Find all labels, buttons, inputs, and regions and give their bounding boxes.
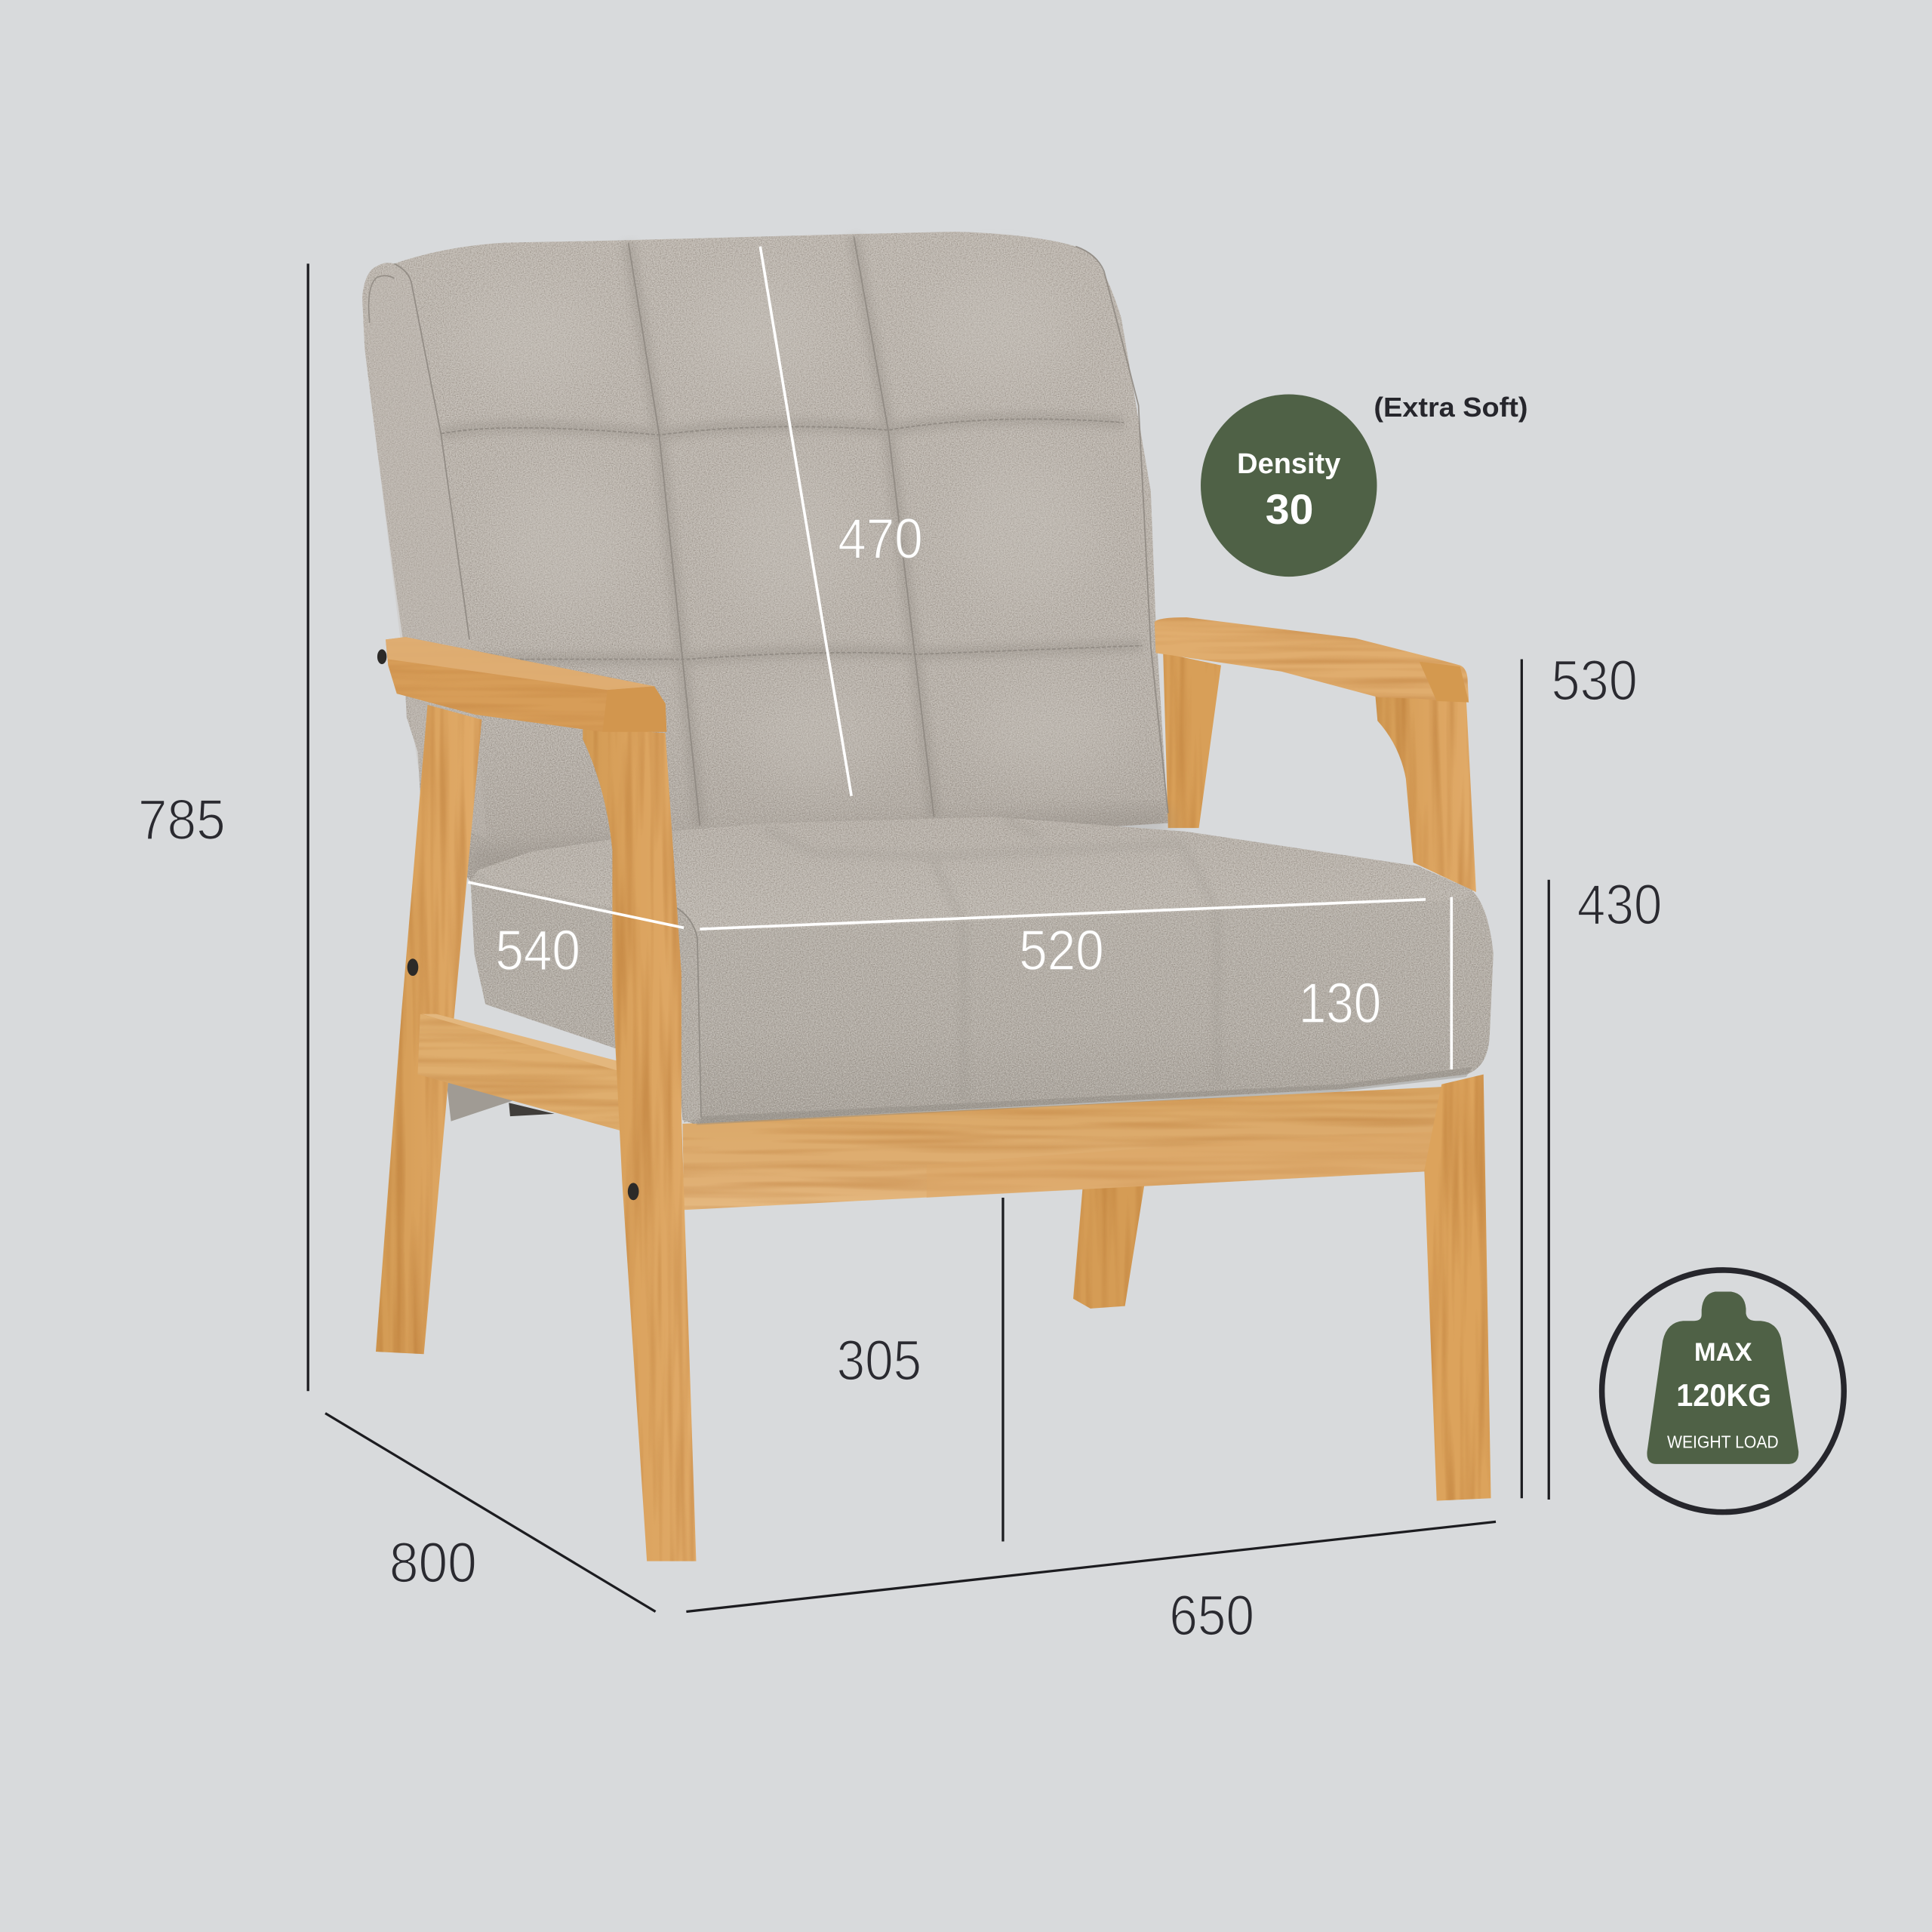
rear right leg [1073, 1183, 1145, 1309]
left arm rest [386, 637, 666, 732]
front rail [682, 1087, 1444, 1210]
backrest upholstery [362, 232, 1168, 888]
seat left side [471, 882, 622, 1050]
backrest tuft shading [441, 236, 1142, 826]
density badge: Density [1237, 448, 1340, 479]
max weight badge: WEIGHT LOAD [1667, 1432, 1779, 1451]
white dimension labels: 470 [838, 507, 923, 571]
right arm rest [1155, 617, 1469, 703]
max weight badge [1602, 1270, 1844, 1512]
badge ring [1602, 1270, 1844, 1512]
dark dimension labels: 430 [1577, 872, 1662, 936]
front rail joint shading [927, 1131, 1444, 1198]
density badge: 30 [1266, 486, 1313, 533]
backrest cushion highlights [456, 271, 1121, 789]
seat front left piping edge [675, 907, 701, 1118]
dark dimension labels: 650 [1169, 1584, 1254, 1647]
dark dimension labels: 305 [837, 1329, 921, 1392]
screws [377, 649, 639, 1200]
max weight badge: 120KG [1676, 1377, 1771, 1413]
seat top surface [478, 817, 1471, 931]
backrest side shading [365, 266, 487, 838]
right arm post [1375, 693, 1476, 892]
rear right post [1163, 653, 1221, 828]
weight icon [1647, 1292, 1798, 1464]
armchair photo [362, 232, 1494, 1561]
dark dimension labels: 785 [138, 788, 226, 851]
white dimension labels: 520 [1019, 918, 1104, 982]
side rail [417, 1014, 622, 1131]
max weight badge: MAX [1694, 1338, 1752, 1367]
rear left post [376, 705, 481, 1354]
dark dimension labels: 800 [389, 1531, 477, 1594]
white seat and back measurement lines [468, 247, 1451, 1069]
seat tuft seams [764, 820, 1217, 1099]
extra soft note: (Extra Soft) [1374, 392, 1527, 423]
front right leg [1424, 1075, 1491, 1501]
white dimension labels: 540 [495, 918, 580, 982]
backrest [362, 232, 1171, 888]
front left post [583, 727, 696, 1561]
black overall measurement lines [308, 263, 1549, 1612]
white dimension labels: 130 [1299, 971, 1381, 1035]
seat bottom shadow [696, 1067, 1472, 1125]
seat shadow on backrest [468, 807, 1171, 875]
dark dimension labels [138, 648, 1662, 1647]
dark dimension labels: 530 [1552, 648, 1638, 712]
seat front left piping [672, 904, 701, 1122]
density badge [1201, 394, 1377, 577]
white dimension labels [495, 507, 1381, 1035]
seat body [471, 817, 1494, 1124]
under seat fabric [446, 1078, 555, 1121]
backrest seams [369, 236, 1168, 826]
seat cushion [471, 817, 1494, 1125]
